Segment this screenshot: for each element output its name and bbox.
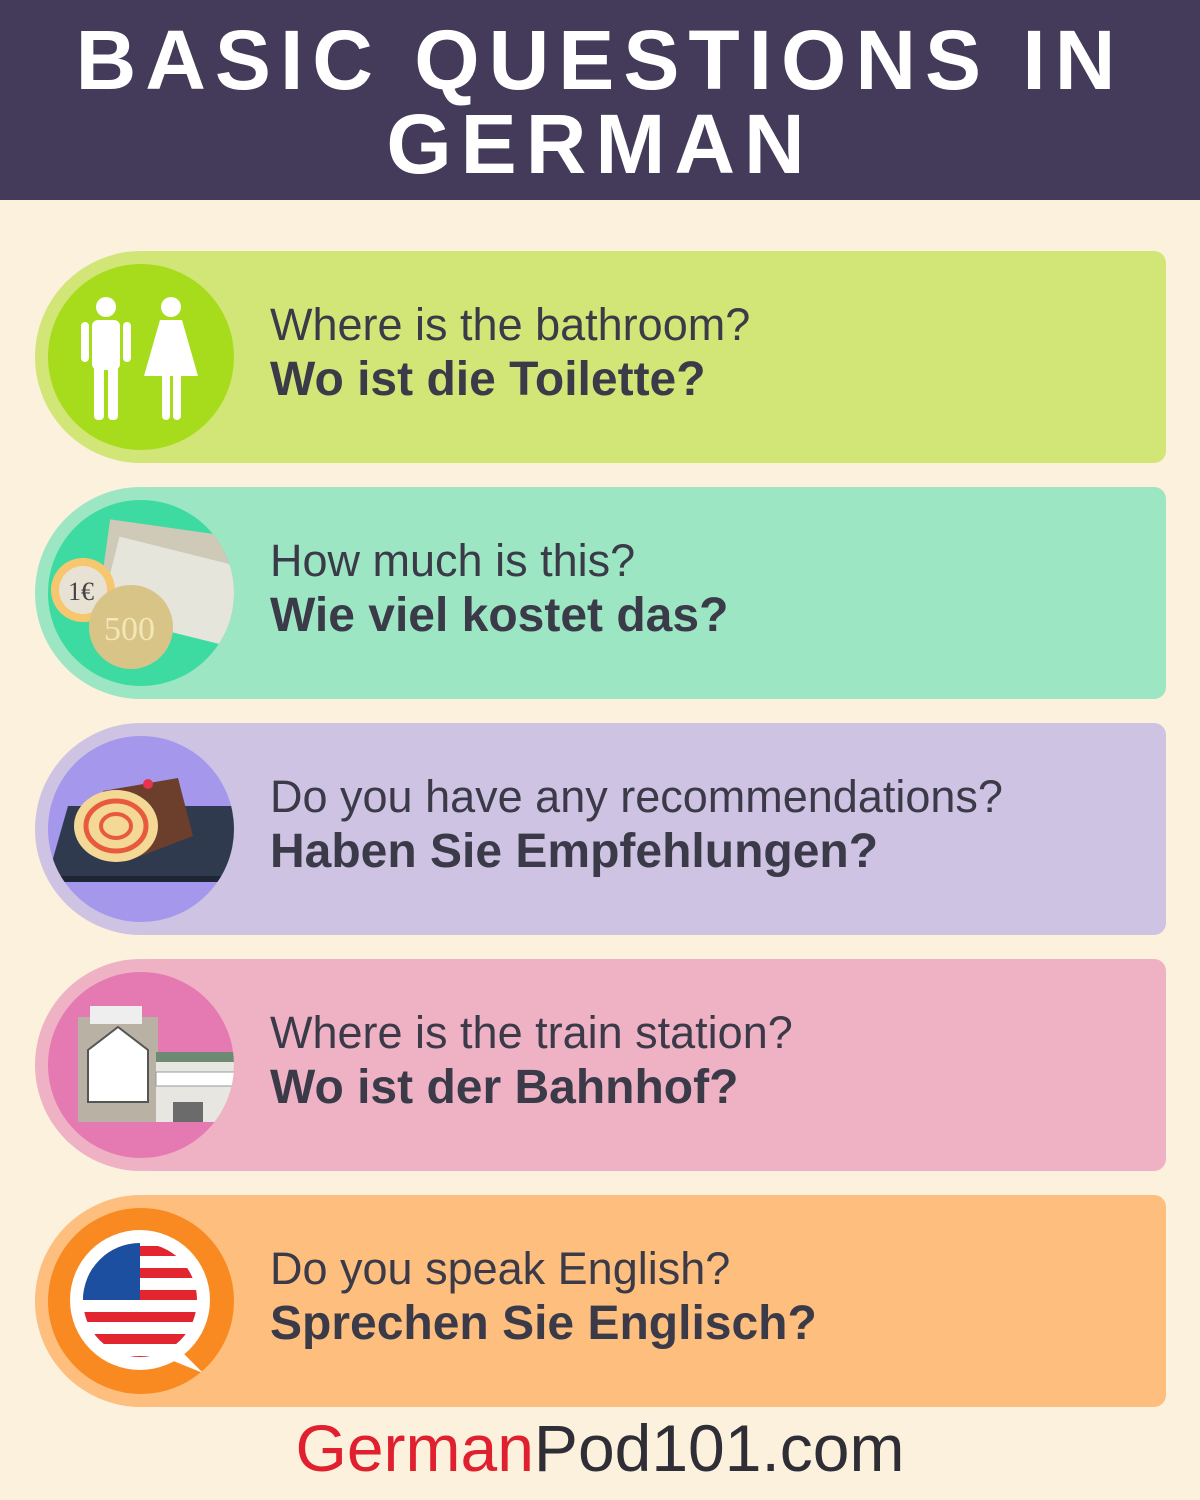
text: Haben Sie Empfehlungen?: [270, 825, 878, 878]
title: [0, 0, 1200, 200]
text: Where is the train station?: [270, 1007, 793, 1058]
text: [270, 1243, 817, 1350]
text: Wo ist der Bahnhof?: [270, 1061, 738, 1114]
icon: money: 1€: [68, 577, 94, 606]
panel: bathroom: [35, 251, 1166, 463]
icon: restroom: [48, 264, 234, 450]
text: [270, 299, 750, 406]
text: Where is the bathroom?: [270, 299, 750, 350]
title: BASIC QUESTIONS IN: [76, 13, 1124, 107]
text: Wo ist die Toilette?: [270, 353, 706, 406]
text: How much is this?: [270, 535, 635, 586]
icon: station: [48, 972, 234, 1158]
panel: price: [35, 487, 1166, 699]
text: [270, 1007, 793, 1114]
icon: money: 500: [104, 611, 155, 648]
icon: money: [48, 500, 234, 686]
text: [270, 535, 728, 642]
text: [270, 771, 1003, 878]
icon: US flag speech bubble: [48, 1208, 234, 1394]
text: Do you have any recommendations?: [270, 771, 1003, 822]
text: Do you speak English?: [270, 1243, 730, 1294]
footer logo: GermanPod101.com: [296, 1411, 904, 1485]
panel: train station: [35, 959, 1166, 1171]
icon: cake roll: [48, 736, 234, 922]
panel: recommendations: [35, 723, 1166, 935]
title: GERMAN: [386, 97, 814, 191]
text: Wie viel kostet das?: [270, 589, 728, 642]
text: Sprechen Sie Englisch?: [270, 1297, 817, 1350]
panel: English: [35, 1195, 1166, 1407]
